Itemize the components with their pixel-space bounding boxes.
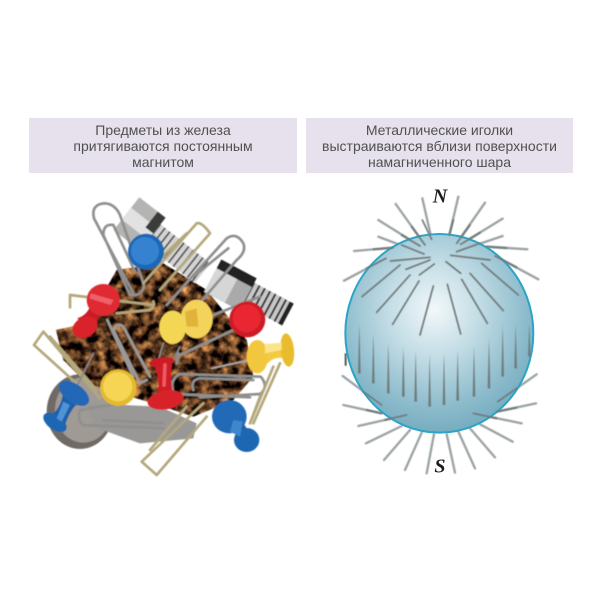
pin: red upright bbox=[146, 356, 185, 412]
pin: blue round head bbox=[128, 234, 164, 270]
pin: red side bbox=[68, 284, 120, 343]
caption: magnetised sphere: Металлические иголки bbox=[366, 122, 513, 138]
vertical needles bbox=[358, 323, 531, 407]
pin: blue left bbox=[40, 376, 94, 436]
caption: iron objects: притягиваются постоянным bbox=[73, 138, 253, 154]
coin bbox=[47, 374, 113, 449]
label: north pole: N bbox=[432, 186, 449, 208]
upper needles bbox=[362, 220, 518, 335]
pin: yellow round head bbox=[100, 369, 137, 406]
pin: yellow right bbox=[247, 333, 296, 373]
caption: iron objects: Предметы из железа bbox=[95, 122, 231, 138]
sphere bbox=[345, 234, 533, 433]
needles on sphere surface bbox=[358, 220, 531, 420]
label: south pole: S bbox=[434, 456, 446, 478]
lower needles bbox=[363, 388, 517, 420]
pin: red round head bbox=[229, 301, 265, 337]
rusty iron piece bbox=[56, 263, 253, 417]
caption: iron objects: магнитом bbox=[132, 154, 194, 170]
illustration: objects attracted to magnet bbox=[34, 197, 296, 475]
caption: magnetised sphere: намагниченного шара bbox=[368, 154, 511, 170]
keys bbox=[87, 403, 197, 443]
caption: magnetised sphere bbox=[306, 118, 573, 173]
paperclips bbox=[34, 203, 280, 475]
bolt top bbox=[114, 197, 215, 290]
illustration: magnetised sphere with needles bbox=[343, 186, 538, 478]
pin: yellow side bbox=[159, 300, 213, 344]
caption: iron objects bbox=[29, 118, 297, 173]
pin: blue right bbox=[212, 400, 259, 452]
caption: magnetised sphere: выстраиваются вблизи поверхности bbox=[322, 138, 557, 154]
bolt right bbox=[204, 260, 296, 332]
outer needles behind sphere bbox=[343, 197, 538, 473]
